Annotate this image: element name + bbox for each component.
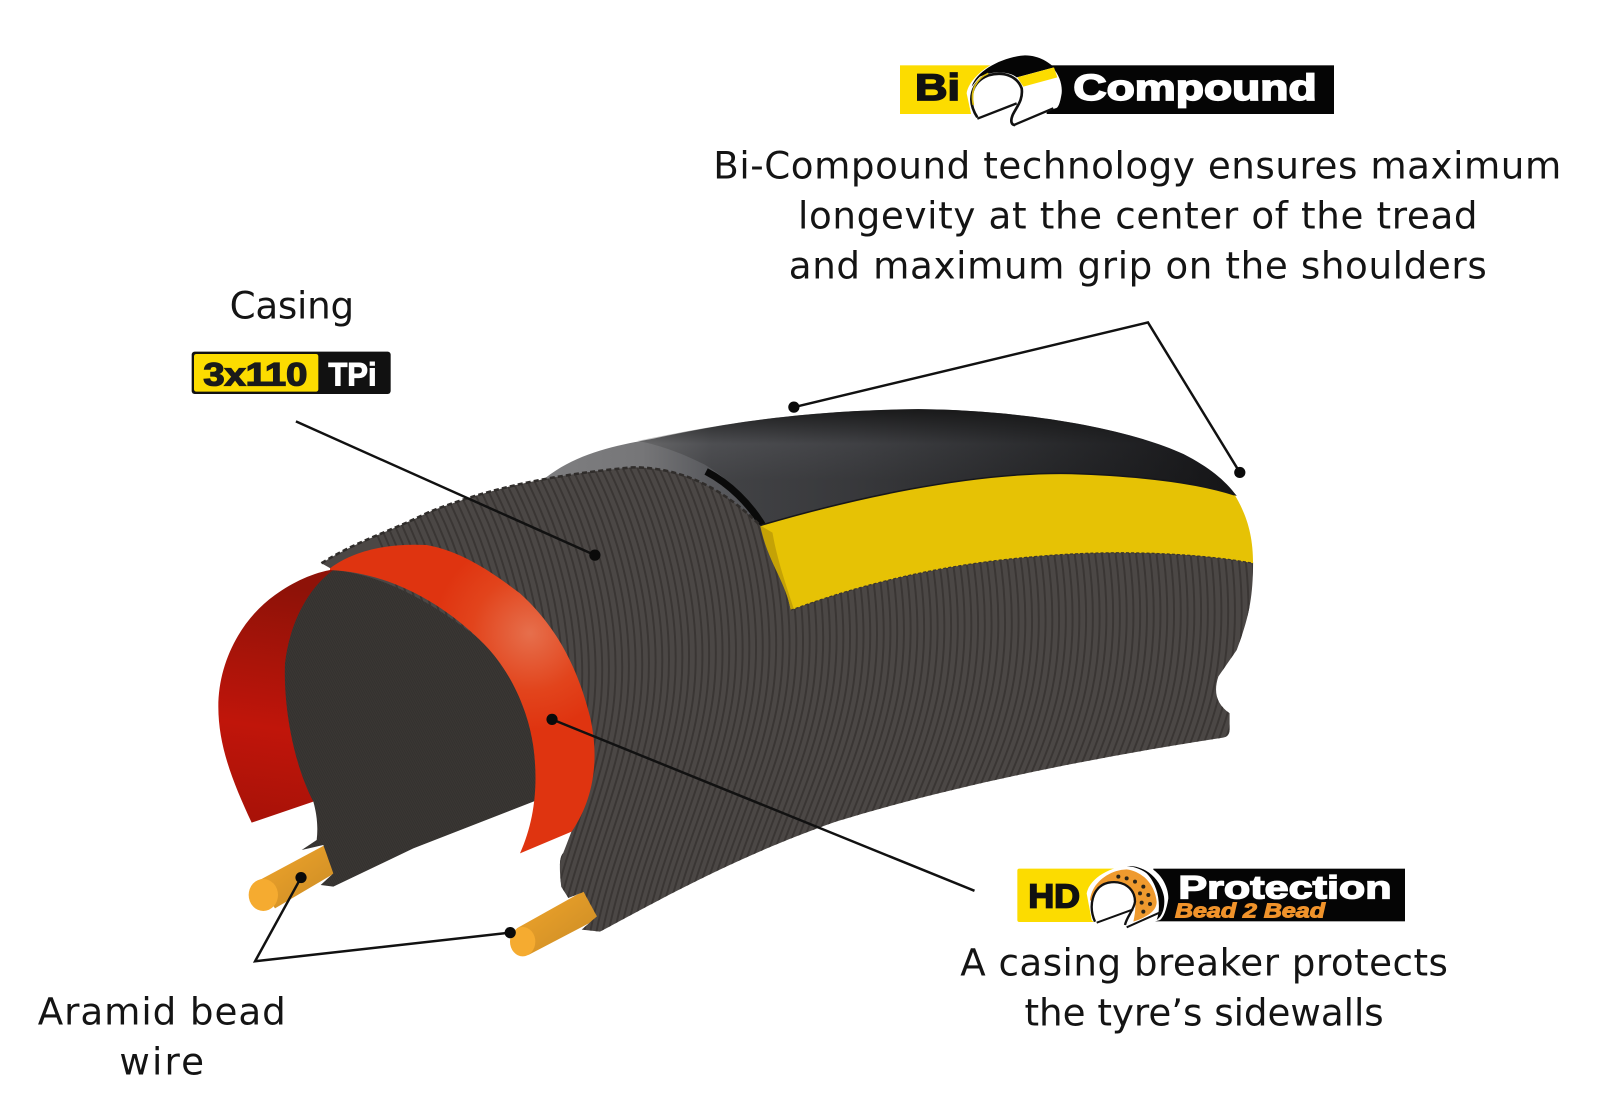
Bi-Compound description: longevity at the center of the tread [798, 194, 1478, 238]
Aramid bead wire label: wire [119, 1039, 204, 1083]
icon: bi-compound tyre [967, 55, 1062, 127]
leader: Aramid bead wire [255, 872, 516, 961]
Aramid bead wire label [38, 989, 286, 1083]
tread: yellow shoulder compound [760, 473, 1253, 610]
Bi-Compound badge [900, 55, 1334, 127]
Bi-Compound badge: Compound [1073, 67, 1317, 108]
Bi-Compound badge: Bi [915, 66, 960, 108]
Aramid bead wire label: Aramid bead [38, 989, 286, 1033]
HD Protection badge: Bead 2 Bead [1175, 900, 1326, 922]
Bi-Compound description: Bi-Compound technology ensures maximum [713, 144, 1561, 188]
leader: Casing [296, 421, 601, 561]
tyre interior [285, 570, 550, 887]
Casing label: Casing [230, 283, 354, 327]
leader: Bi-Compound [788, 322, 1245, 478]
front breaker band [330, 545, 595, 853]
Bi-Compound description [713, 144, 1561, 288]
rear breaker band [218, 569, 333, 823]
HD Protection description: the tyre’s sidewalls [1024, 991, 1384, 1035]
HD Protection description [960, 941, 1448, 1035]
HD Protection description: A casing breaker protects [960, 941, 1448, 985]
tread: black rubber compound [546, 409, 1237, 531]
HD Protection badge: Protection [1178, 869, 1392, 905]
HD Protection badge [1017, 864, 1405, 929]
HD Protection badge: HD [1028, 878, 1080, 915]
leader lines [255, 322, 1245, 961]
3x110 TPi badge: 3x110 [203, 356, 307, 392]
red casing breaker and interior [218, 545, 595, 887]
aramid bead wires [249, 845, 602, 956]
3x110 TPi badge: TPi [328, 356, 377, 392]
Bi-Compound description: and maximum grip on the shoulders [789, 244, 1487, 288]
tyre cutaway illustration [218, 409, 1254, 956]
3x110 TPi badge [192, 352, 391, 394]
casing body with ribs [320, 466, 1254, 932]
leader: HD Protection [546, 714, 974, 891]
icon: mesh-protected tyre [1087, 864, 1168, 929]
